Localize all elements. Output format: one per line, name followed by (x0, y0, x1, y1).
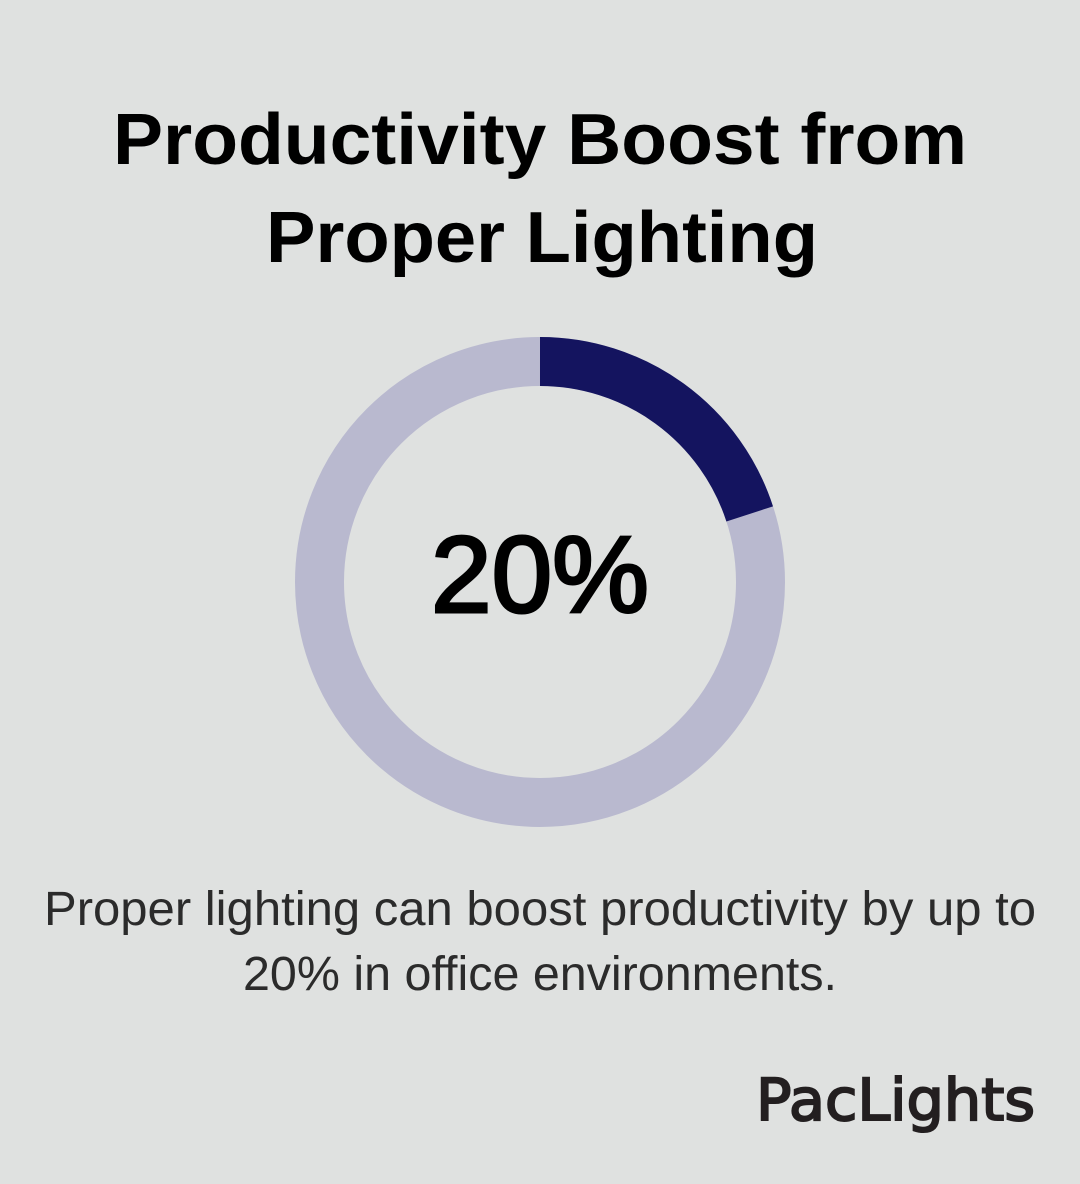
center value: 20% (431, 514, 649, 636)
donut value segment (540, 362, 750, 514)
title (113, 100, 967, 278)
donut track (320, 362, 760, 802)
donut chart: 20% (320, 362, 760, 802)
description: 20% in office environments. (243, 948, 837, 1001)
logo: PacLights: PacLights (756, 1066, 1035, 1134)
title: Proper Lighting (266, 198, 818, 278)
description: Proper lighting can boost productivity by up to (44, 883, 1036, 936)
title: Productivity Boost from (113, 100, 967, 180)
description (44, 883, 1036, 1001)
